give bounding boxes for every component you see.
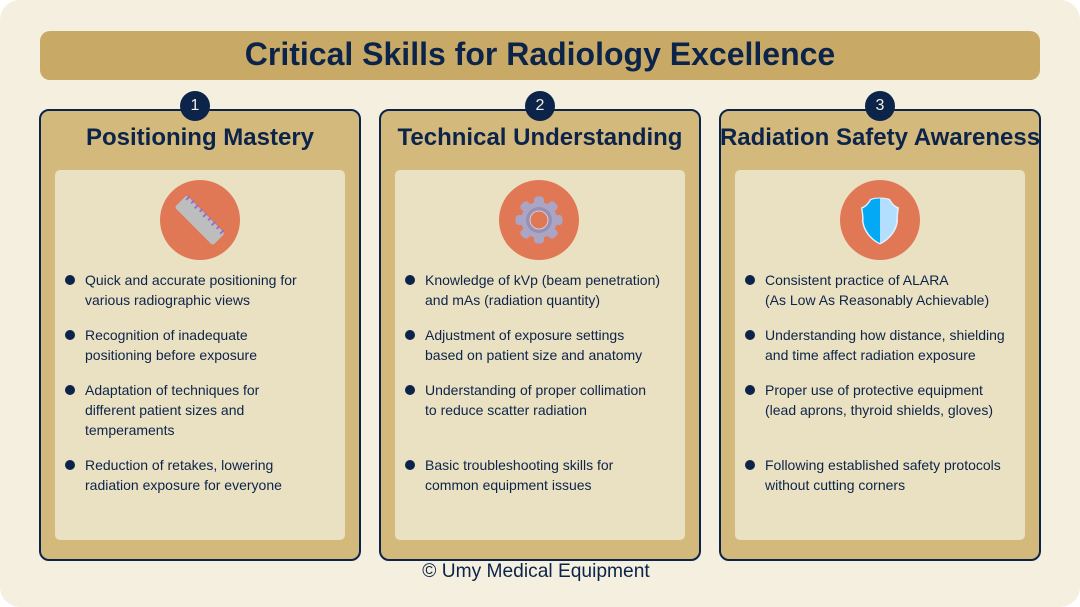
number badge 1: 1	[191, 97, 199, 114]
bullet: collimation: to reduce scatter radiation	[425, 402, 587, 418]
bullet: adaptation: temperaments	[85, 422, 174, 438]
number badge 2: 2	[536, 97, 544, 114]
bullet: safety protocols	[745, 457, 1001, 493]
bullet: troubleshooting: Basic troubleshooting skills for	[425, 457, 613, 473]
bullet: kVp and mAs: and mAs (radiation quantity)	[425, 292, 600, 308]
bullet: distance, shielding and time: and time affect radiation exposure	[765, 347, 976, 363]
bullet: adaptation	[65, 382, 260, 438]
bullet: ALARA: Consistent practice of ALARA	[765, 272, 949, 288]
bullet: troubleshooting	[405, 457, 614, 493]
footer credit: © Umy Medical Equipment	[422, 561, 650, 582]
bullet: distance, shielding and time	[745, 327, 1005, 363]
bullet: collimation	[405, 382, 646, 418]
panel: technical understanding	[379, 109, 701, 561]
content area: technical understanding	[395, 170, 685, 540]
bullet: quick positioning	[65, 272, 297, 308]
number badge 3: 3	[876, 97, 884, 114]
bullet: safety protocols: without cutting corners	[765, 477, 905, 493]
number badge 1	[180, 91, 210, 121]
bullet: quick positioning: Quick and accurate positioning for	[85, 272, 297, 288]
heading: positioning mastery: Positioning Mastery	[86, 124, 314, 151]
bullet: inadequate positioning: positioning before exposure	[85, 347, 257, 363]
bullet: protective equipment	[745, 382, 993, 418]
icon: gear	[499, 180, 579, 260]
bullet: exposure settings: Adjustment of exposure settings	[425, 327, 624, 343]
heading: technical understanding: Technical Understanding	[398, 124, 682, 151]
title: Critical Skills for Radiology Excellence	[245, 36, 835, 72]
bullet: kVp and mAs	[405, 272, 660, 308]
icon: ruler	[160, 180, 240, 260]
content area: radiation safety awareness	[735, 170, 1025, 540]
bullet: exposure settings: based on patient size and anatomy	[425, 347, 642, 363]
bullet: inadequate positioning: Recognition of inadequate	[85, 327, 248, 343]
panel: radiation safety awareness	[719, 109, 1041, 561]
bullet: protective equipment: (lead aprons, thyroid shields, gloves)	[765, 402, 993, 418]
title	[40, 31, 1040, 80]
bullet: kVp and mAs: Knowledge of kVp (beam penetration)	[425, 272, 660, 288]
icon: shield	[840, 180, 920, 260]
number badge 3	[865, 91, 895, 121]
bullet: safety protocols: Following established safety protocols	[765, 457, 1001, 473]
content area: positioning mastery	[55, 170, 345, 540]
bullet: ALARA: (As Low As Reasonably Achievable)	[765, 292, 989, 308]
bullet: ALARA	[745, 272, 989, 308]
bullet: adaptation: Adaptation of techniques for	[85, 382, 259, 398]
bullet: protective equipment: Proper use of protective equipment	[765, 382, 983, 398]
bullet: quick positioning: various radiographic views	[85, 292, 250, 308]
bullet: retakes: Reduction of retakes, lowering	[85, 457, 273, 473]
bullet: adaptation: different patient sizes and	[85, 402, 244, 418]
bullet: retakes: radiation exposure for everyone	[85, 477, 282, 493]
number badge 2	[525, 91, 555, 121]
panel: positioning mastery	[39, 109, 361, 561]
bullet: exposure settings	[405, 327, 642, 363]
bullet: troubleshooting: common equipment issues	[425, 477, 592, 493]
bullet: collimation: Understanding of proper collimation	[425, 382, 646, 398]
heading: radiation safety awareness: Radiation Safety Awareness	[720, 124, 1040, 151]
bullet: inadequate positioning	[65, 327, 257, 363]
bullet: distance, shielding and time: Understanding how distance, shielding	[765, 327, 1005, 343]
bullet: retakes	[65, 457, 282, 493]
